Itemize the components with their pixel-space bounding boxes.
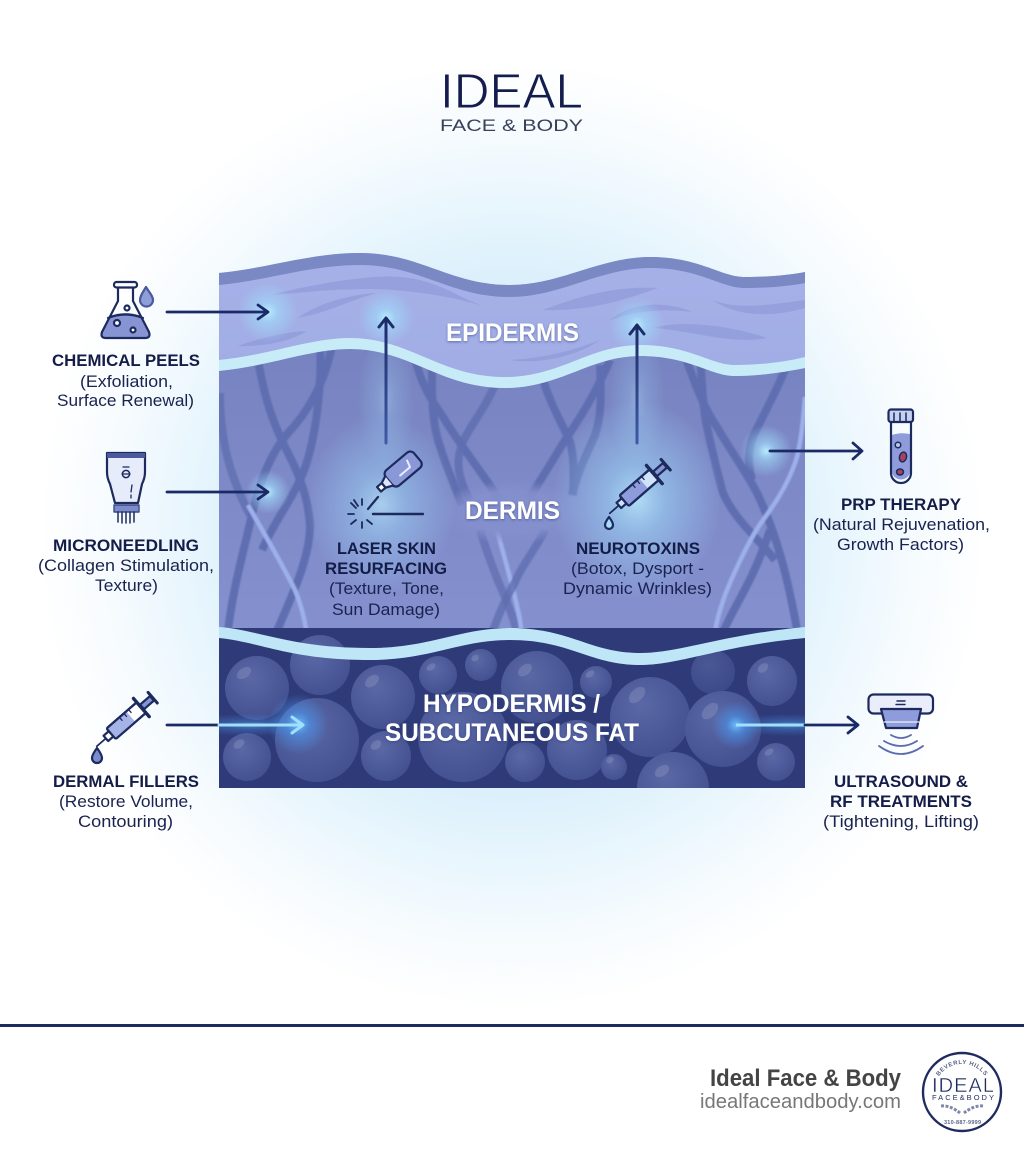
label: laser skin resurfacing: LASER SKIN: [337, 539, 436, 558]
footer round logo: 310-887-9999: [944, 1120, 981, 1126]
dermis glows: [248, 353, 789, 586]
footer round logo: BEVERLY HILLS: [936, 1060, 988, 1076]
label: laser skin resurfacing: (Texture, Tone,: [329, 579, 444, 598]
label: dermal fillers: (Restore Volume,: [59, 792, 193, 811]
title logo: IDEAL: [440, 65, 583, 119]
arrow: dermal fillers to hypodermis: [167, 717, 303, 733]
skin cross-section panel: [219, 253, 805, 788]
epidermis layer: [219, 253, 805, 388]
icon: dermal filler syringe: [89, 689, 161, 763]
label: neurotoxins: [563, 539, 712, 598]
icon: neurotoxin syringe: [602, 456, 674, 529]
layer label: epidermis: EPIDERMIS: [446, 319, 579, 347]
label: laser skin resurfacing: [325, 539, 447, 619]
arrow: microneedling to dermis: [167, 485, 268, 499]
footer round logo: [922, 1052, 1002, 1132]
icon: microneedling pen: [107, 453, 145, 523]
icon: ultrasound device: [868, 694, 933, 754]
label: ultrasound and RF treatments: (Tightening, Lifting): [823, 812, 979, 831]
layer label: hypodermis: HYPODERMIS /: [423, 690, 600, 718]
label: chemical peels: (Exfoliation,: [80, 372, 173, 391]
hypodermis layer: [219, 628, 805, 788]
arrow: dermis to PRP therapy: [770, 443, 862, 459]
dermis layer: [219, 340, 805, 650]
label: laser skin resurfacing: RESURFACING: [325, 559, 447, 578]
icon: chemical flask: [101, 282, 153, 338]
label: microneedling: (Collagen Stimulation,: [38, 556, 214, 575]
footer: [0, 1024, 1024, 1132]
footer brand text: Ideal Face & Body: [710, 1065, 902, 1092]
arrow: hypodermis to ultrasound: [736, 717, 858, 733]
label: neurotoxins: (Botox, Dysport -: [571, 559, 704, 578]
fat cells: [223, 635, 797, 788]
label: microneedling: Texture): [95, 576, 158, 595]
footer round logo: FACE&BODY: [932, 1093, 994, 1102]
epidermis dermis boundary band: [219, 338, 805, 388]
arrow: neurotoxins to epidermis: [630, 325, 644, 443]
label: ultrasound and RF treatments: [823, 772, 979, 831]
title logo: FACE & BODY: [440, 116, 583, 135]
icon: PRP test tube: [888, 410, 913, 483]
label: PRP therapy: [813, 495, 990, 554]
label: dermal fillers: [53, 772, 199, 831]
label: PRP therapy: (Natural Rejuvenation,: [813, 515, 990, 534]
layer label: hypodermis: [385, 690, 639, 747]
label: ultrasound and RF treatments: ULTRASOUND &: [834, 772, 968, 791]
layer label: hypodermis: SUBCUTANEOUS FAT: [385, 719, 639, 747]
label: dermal fillers: Contouring): [78, 812, 173, 831]
footer round logo: IDEAL: [932, 1075, 994, 1097]
label: dermal fillers: DERMAL FILLERS: [53, 772, 199, 791]
arrow: laser to epidermis: [379, 318, 393, 443]
dermis hypodermis boundary band: [219, 627, 805, 665]
icon: laser device: [348, 449, 424, 528]
label: chemical peels: CHEMICAL PEELS: [52, 351, 200, 370]
arrow: chemical peels to epidermis: [167, 305, 268, 319]
label: PRP therapy: Growth Factors): [837, 535, 964, 554]
label: chemical peels: Surface Renewal): [57, 391, 194, 410]
label: laser skin resurfacing: Sun Damage): [332, 600, 440, 619]
label: neurotoxins: Dynamic Wrinkles): [563, 579, 712, 598]
label: neurotoxins: NEUROTOXINS: [576, 539, 700, 558]
layer label: dermis: DERMIS: [465, 497, 560, 525]
label: ultrasound and RF treatments: RF TREATMENTS: [830, 792, 972, 811]
footer brand text: idealfaceandbody.com: [700, 1091, 901, 1113]
footer brand text: [700, 1065, 902, 1113]
label: PRP therapy: PRP THERAPY: [841, 495, 962, 514]
label: microneedling: [38, 536, 214, 595]
label: chemical peels: [52, 351, 200, 410]
label: microneedling: MICRONEEDLING: [53, 536, 199, 555]
collagen fibers: [220, 345, 805, 650]
